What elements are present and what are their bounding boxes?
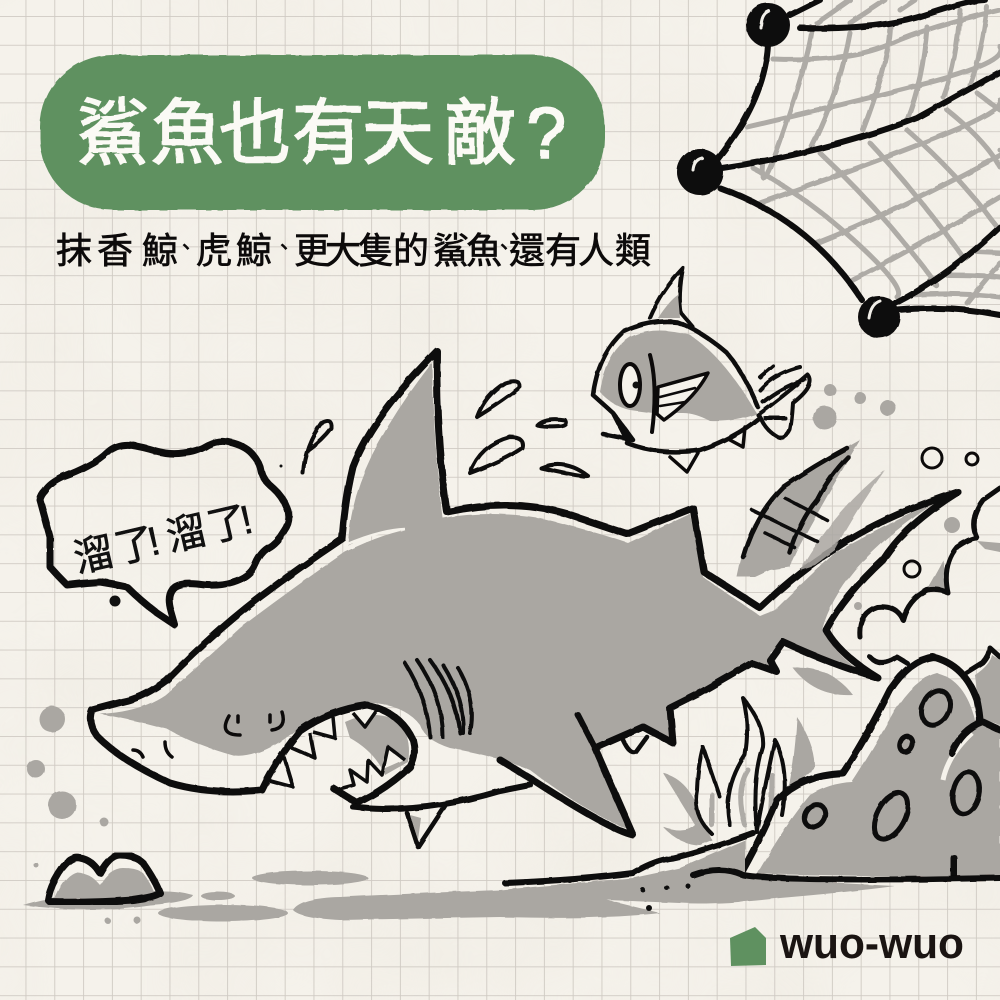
rock holes bbox=[800, 686, 983, 845]
logo bbox=[730, 919, 964, 968]
shark bbox=[90, 351, 958, 847]
small rock bbox=[48, 855, 160, 902]
rock fill bbox=[757, 673, 1000, 878]
gills bbox=[405, 660, 472, 737]
seaweed shadow bbox=[663, 773, 712, 845]
fish eye and gill bbox=[620, 355, 655, 432]
mouth gums bbox=[345, 715, 409, 775]
fish outline bbox=[593, 321, 758, 452]
net mesh bbox=[747, 0, 1000, 303]
tail shadow bbox=[793, 668, 853, 695]
rocks bbox=[743, 657, 1000, 878]
subtitle: 還有人類 bbox=[509, 230, 651, 271]
rock outline bbox=[743, 657, 1000, 878]
fish body fill bbox=[600, 330, 757, 421]
title banner bbox=[40, 55, 605, 210]
seabed line bbox=[505, 833, 1000, 883]
fin highlight bbox=[345, 529, 405, 545]
subtitle: 虎鯨 bbox=[196, 230, 272, 271]
seabed bbox=[23, 833, 1000, 922]
seabed shadows bbox=[293, 840, 895, 920]
subtitle: 、 bbox=[176, 237, 196, 259]
cloud outline bbox=[860, 488, 1000, 673]
net floats bbox=[677, 3, 900, 338]
shark lower fins bbox=[407, 737, 647, 847]
fish tail bbox=[758, 366, 810, 438]
rock highlight bbox=[943, 733, 972, 780]
fish pectoral fin bbox=[657, 373, 708, 420]
motion swoosh bbox=[737, 440, 885, 577]
water drops bbox=[303, 381, 588, 476]
ink dots bbox=[110, 596, 120, 606]
bubbles bbox=[904, 448, 978, 577]
eyes and nostrils bbox=[133, 712, 283, 757]
fish small fins bbox=[670, 427, 745, 472]
bubble outline bbox=[40, 441, 289, 625]
subtitle: 、 bbox=[274, 237, 294, 259]
fishing net bbox=[677, 0, 1000, 338]
teeth bbox=[267, 710, 405, 802]
ink dots right bbox=[813, 384, 896, 430]
ink splatters left bbox=[27, 706, 140, 924]
shark outline bbox=[90, 539, 414, 803]
subtitle: 、 bbox=[494, 237, 514, 259]
subtitle: 更大隻的鯊魚 bbox=[294, 230, 502, 271]
fish dorsal fin bbox=[650, 268, 693, 327]
net ropes bbox=[717, 0, 1000, 315]
logo wordmark: wuo-wuo bbox=[779, 919, 964, 968]
fish bbox=[593, 268, 810, 472]
shark body fill bbox=[100, 363, 945, 830]
seabed dots bbox=[640, 888, 646, 892]
bubble text: 溜了!溜了! bbox=[70, 498, 257, 582]
banner pill bbox=[40, 55, 605, 210]
cloud fill bbox=[928, 560, 948, 592]
subtitle: 抹香鯨 bbox=[56, 230, 178, 271]
seaweed strokes bbox=[696, 698, 785, 834]
water cloud bbox=[854, 448, 1000, 725]
speech bubble bbox=[40, 441, 289, 625]
title text: 鯊魚也有天敵? bbox=[77, 94, 566, 174]
logo house icon bbox=[730, 927, 766, 966]
seaweed bbox=[663, 698, 815, 845]
